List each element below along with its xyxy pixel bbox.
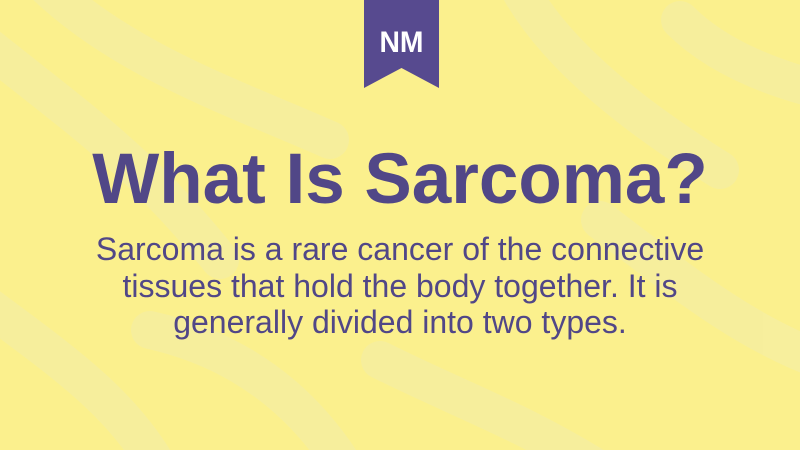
description text: Sarcoma is a rare cancer of the connective	[96, 231, 704, 267]
logo ribbon	[364, 0, 439, 88]
description text: tissues that hold the body together. It is	[122, 268, 678, 304]
logo letters: NM	[380, 26, 424, 59]
description text: generally divided into two types.	[173, 304, 627, 340]
description text	[96, 231, 704, 340]
title: What Is Sarcoma?	[92, 140, 708, 219]
